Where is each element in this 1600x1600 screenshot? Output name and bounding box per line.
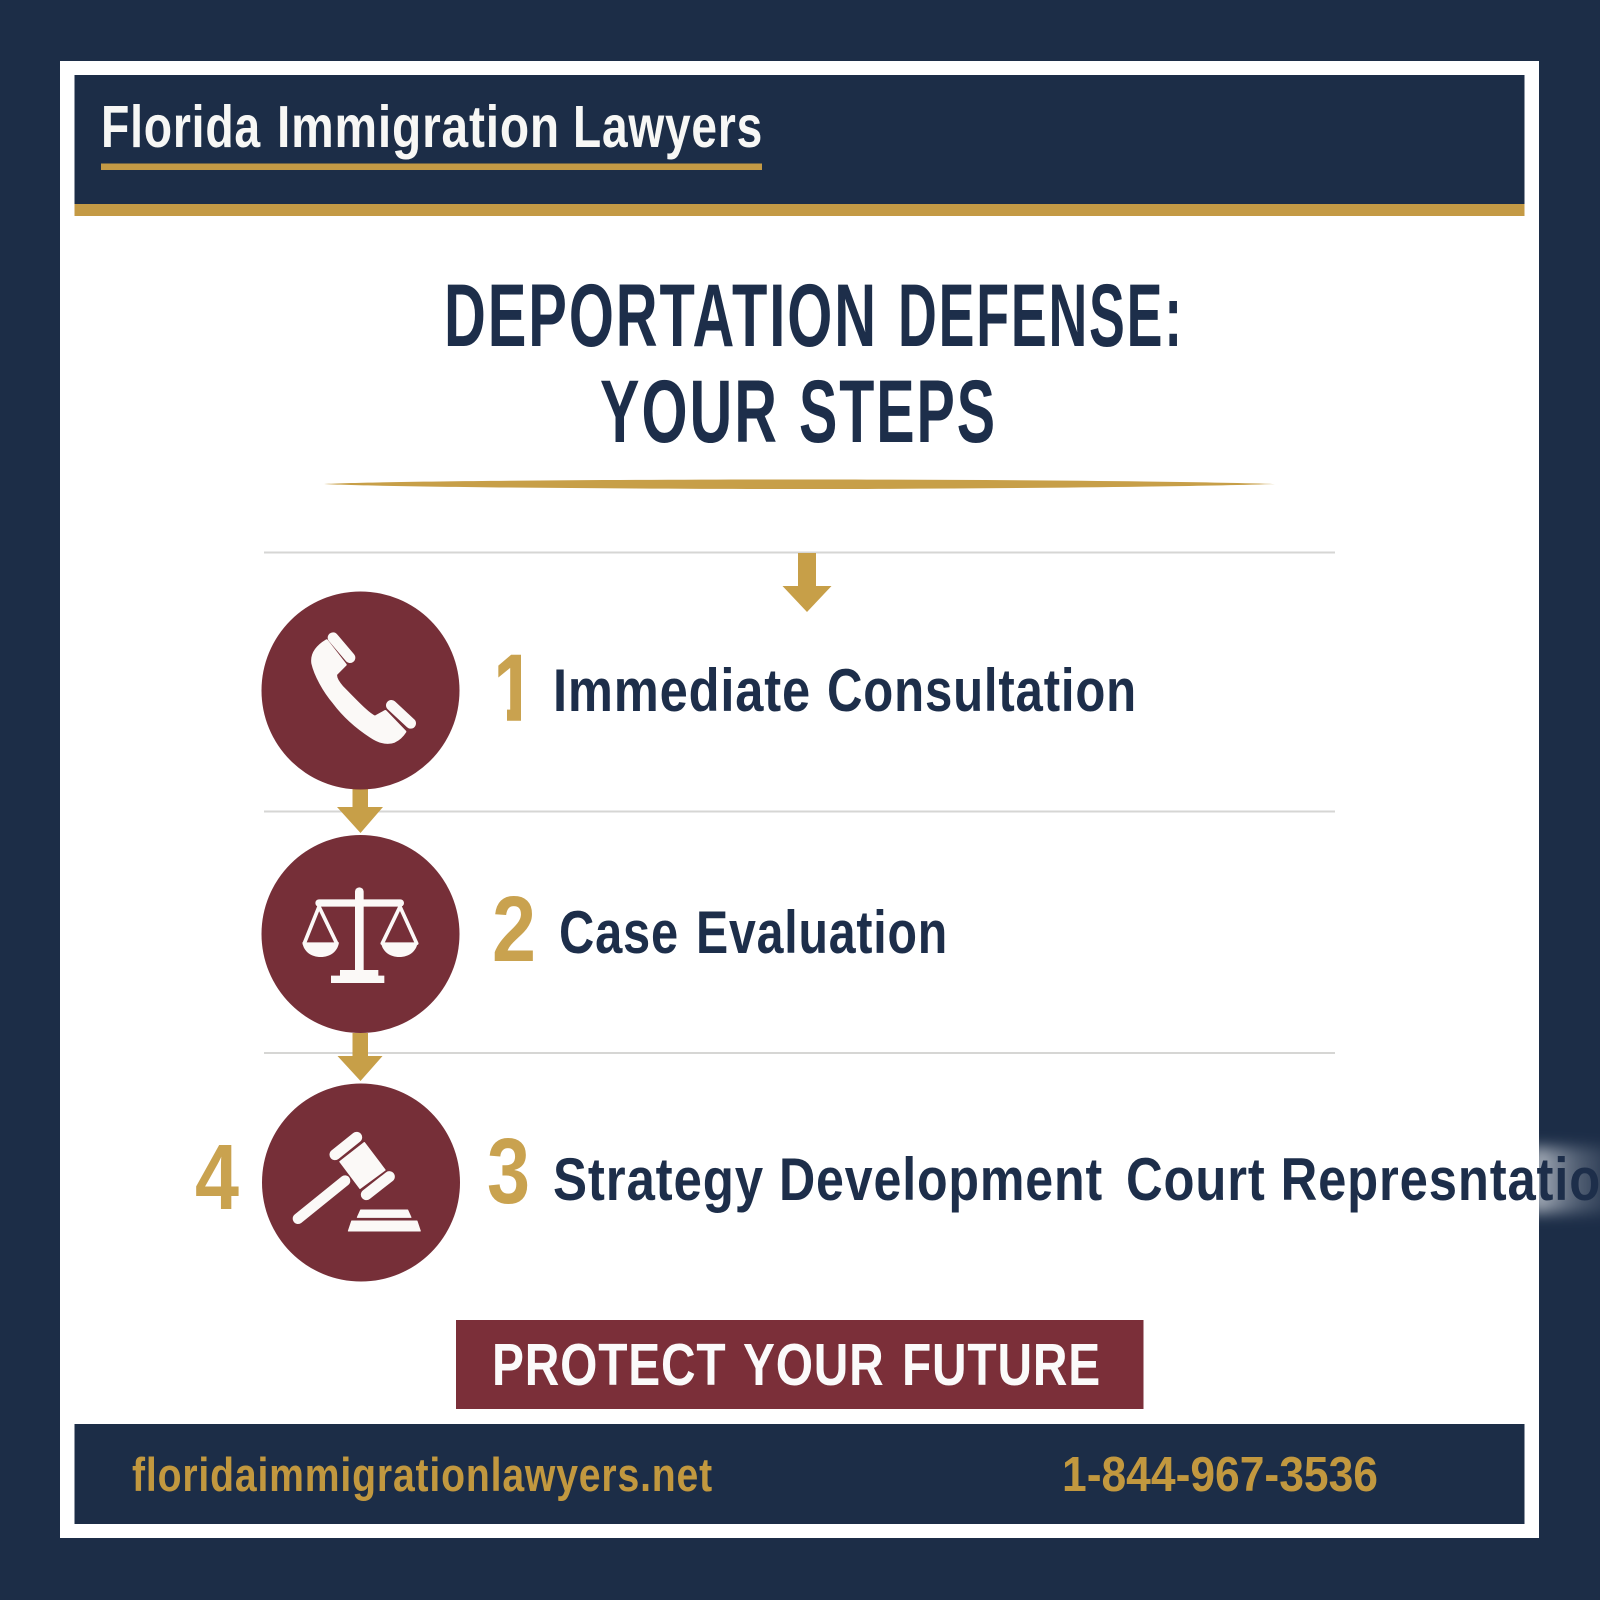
footer phone: 1-844-967-3536 [1062,1448,1378,1502]
step 2 number: 2 [492,877,536,981]
step 1 number: 1 [494,635,534,740]
step 3 label: Development [779,1146,1103,1213]
arrow: step 2 to step 3 [338,1033,382,1081]
header brand name: Lawyers [573,94,763,160]
step 3 number: 3 [487,1119,530,1223]
main title: STEPS [799,361,997,461]
step 2 label [559,899,948,966]
step 2 label: Evaluation [696,899,948,966]
main title [444,265,1184,461]
main title: DEPORTATION [444,265,878,365]
call to action banner: PROTECT YOUR FUTURE [492,1332,1101,1398]
main title: DEFENSE: [898,265,1184,365]
step 3 label: Strategy [553,1146,764,1213]
header banner [74,75,1524,216]
step 2 icon: scales of justice [262,835,460,1033]
step 1 label: Consultation [827,657,1137,724]
footer bar [74,1424,1524,1524]
tapered gold divider [324,480,1275,489]
header brand name: Florida [101,94,261,160]
arrow: step 1 to step 2 [337,789,383,833]
call to action banner [456,1320,1144,1409]
step 1 label [553,657,1137,724]
step 3 icon: gavel [262,1084,460,1282]
step 4 number: 4 [195,1125,239,1229]
step 2 label: Case [559,899,679,966]
step 3 label [553,1146,1103,1213]
header brand name [101,94,763,160]
arrow: into step 1 [782,553,832,612]
main title: YOUR [600,361,779,461]
header underline [101,164,762,170]
step 1 label: Immediate [553,657,811,724]
header brand name: Immigration [277,94,560,160]
edge glow behind overflowing label [1530,1147,1600,1213]
footer website: floridaimmigrationlawyers.net [132,1448,713,1501]
step 1 icon: telephone [262,592,460,790]
row divider lines [264,552,1335,1053]
